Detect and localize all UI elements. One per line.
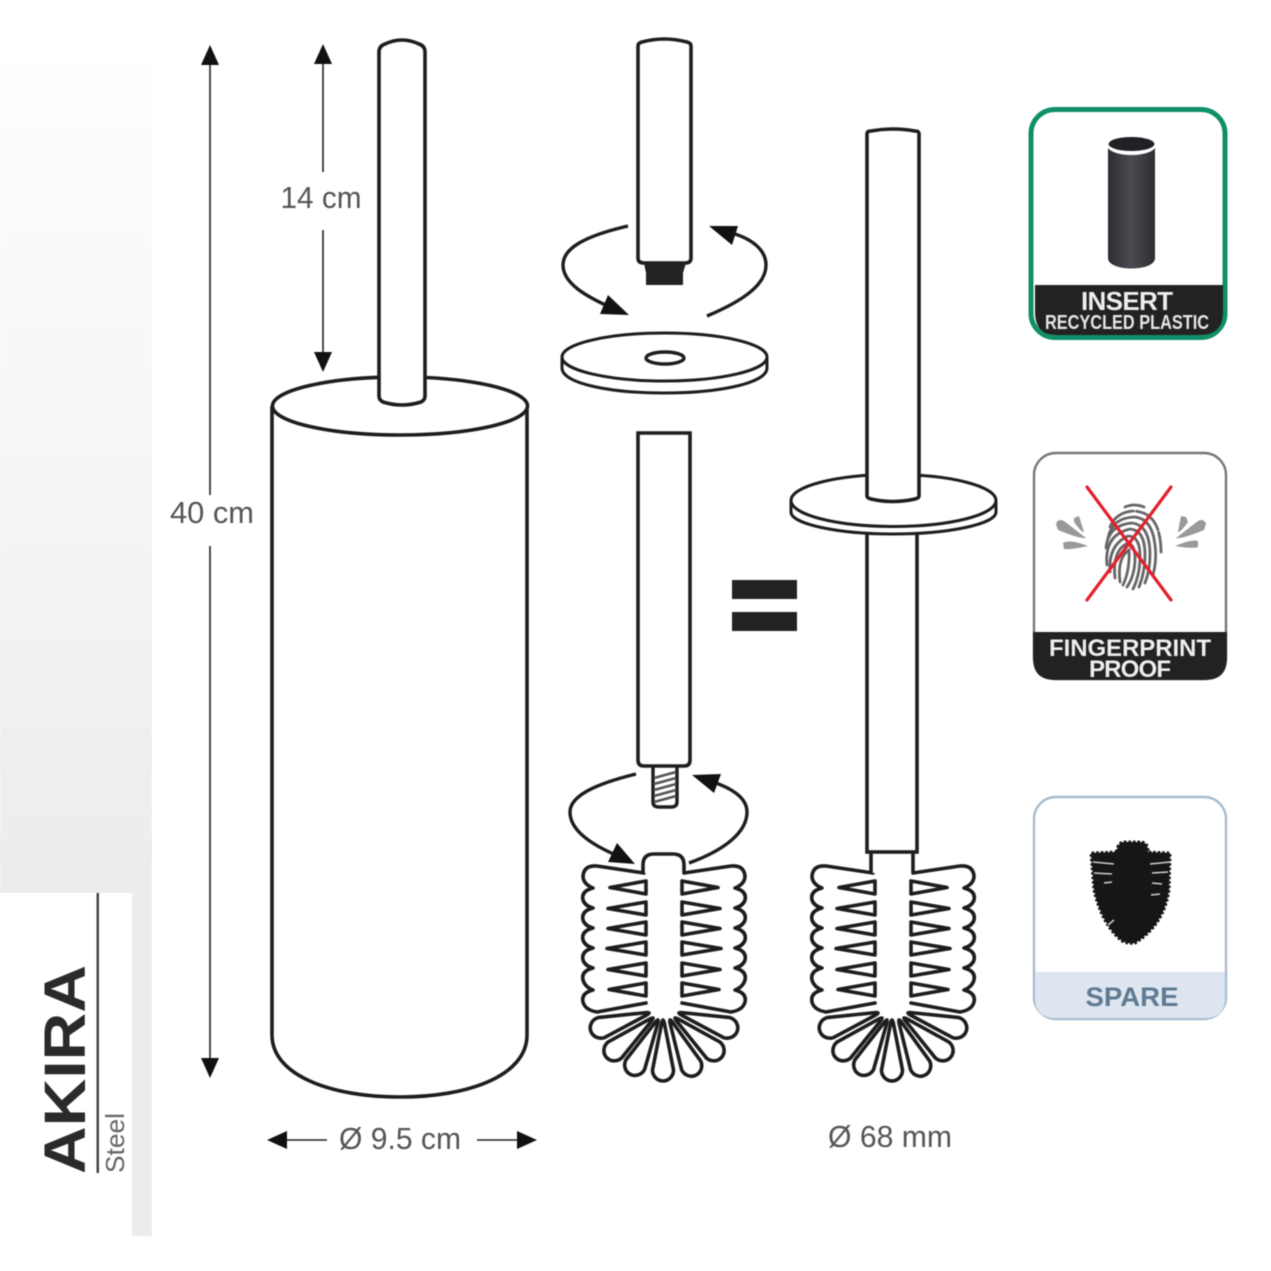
text: spare: SPARE [1086,982,1178,1012]
rotation arrows: lower [570,774,747,864]
upper handle part [638,39,691,285]
icon: dark insert cylinder [1108,137,1156,268]
holder cylinder with handle [272,40,528,1097]
product title: Akira Steel [33,893,130,1174]
product title: Akira Steel: AKIRA [33,965,98,1174]
icon: smudge marks [1056,516,1206,549]
dimension: handle 14 cm: 14 cm [280,180,362,215]
text: proof: PROOF [1089,656,1171,683]
card: insert recycled plastic [1031,110,1225,338]
label: diameter 68 mm: Ø 68 mm [828,1119,952,1154]
icon: red cross [1087,487,1171,600]
text: recycled plastic: RECYCLED PLASTIC [1045,312,1209,334]
card: spare [1034,797,1226,1019]
text: insert: INSERT [1081,286,1173,316]
icon: fingerprint [1106,505,1161,589]
card: fingerprint proof [1033,453,1227,683]
equals sign [732,580,797,631]
background panel [0,65,152,1236]
dimension: diameter 9.5 cm [267,1121,537,1156]
disc [562,333,767,393]
dimension: height 40 cm: 40 cm [170,495,254,530]
dimension: height 40 cm [170,45,254,1078]
assembled brush [791,129,996,1081]
lower handle part with thread [638,433,690,807]
rotation arrows: upper [563,226,766,316]
text: fingerprint: FINGERPRINT [1049,635,1211,662]
dimension: diameter 9.5 cm: Ø 9.5 cm [339,1121,461,1156]
icon: spare brush head [1091,842,1170,943]
brush head: separate [583,854,745,1081]
dimension: handle 14 cm [280,44,362,372]
product title: Akira Steel: Steel [100,1113,130,1173]
